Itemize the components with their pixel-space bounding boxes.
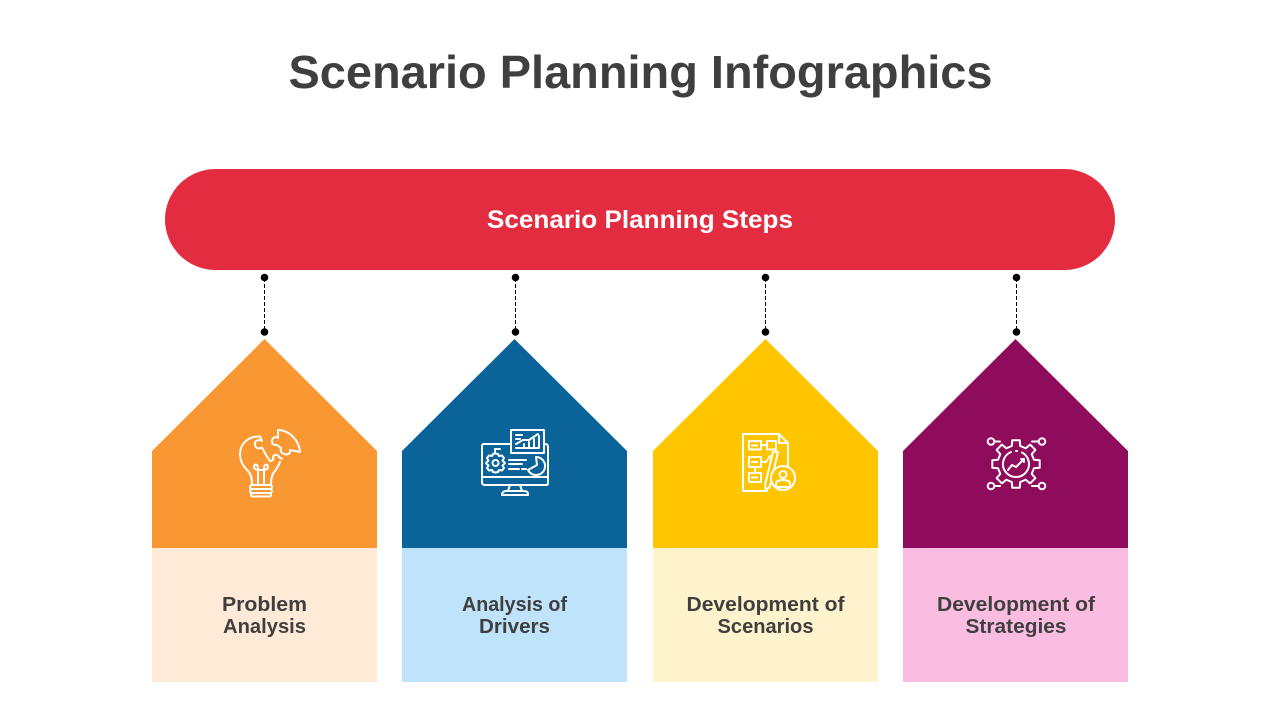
panel: analysis of drivers bbox=[402, 339, 627, 682]
panel: problem analysis bbox=[152, 339, 377, 682]
panel: development of scenarios bbox=[653, 339, 878, 682]
connector 4 bbox=[1013, 274, 1020, 336]
label box: development of scenarios: Scenarios bbox=[718, 616, 814, 638]
banner: scenario planning steps: Scenario Planning Steps bbox=[487, 206, 793, 234]
connector 3 bbox=[762, 274, 769, 336]
icon: light bulb with puzzle piece bbox=[240, 430, 300, 496]
icon: flowchart document with person bbox=[743, 434, 795, 491]
icon: monitor with charts bbox=[482, 430, 548, 495]
label box: problem analysis bbox=[152, 548, 377, 682]
connector 1 bbox=[261, 274, 268, 336]
label box: analysis of drivers bbox=[402, 548, 627, 682]
house shape: yellow bbox=[653, 339, 878, 548]
label box: development of strategies bbox=[903, 548, 1128, 682]
label box: analysis of drivers: Drivers bbox=[479, 616, 550, 638]
house shape: orange bbox=[152, 339, 377, 548]
label box: development of strategies: Development of bbox=[937, 594, 1095, 616]
title: Scenario Planning Infographics bbox=[288, 46, 992, 98]
banner: scenario planning steps bbox=[165, 169, 1115, 270]
label box: development of scenarios: Development of bbox=[686, 594, 845, 616]
house shape: purple bbox=[903, 339, 1128, 548]
label box: problem analysis: Analysis bbox=[223, 616, 306, 638]
house shape: blue bbox=[402, 339, 627, 548]
connector 2 bbox=[512, 274, 519, 336]
icon: gear with trend line and nodes bbox=[988, 438, 1045, 489]
label box: analysis of drivers: Analysis of bbox=[462, 594, 567, 616]
label box: development of scenarios bbox=[653, 548, 878, 682]
label box: development of strategies: Strategies bbox=[966, 616, 1066, 638]
label box: problem analysis: Problem bbox=[222, 594, 307, 616]
panel: development of strategies bbox=[903, 339, 1128, 682]
